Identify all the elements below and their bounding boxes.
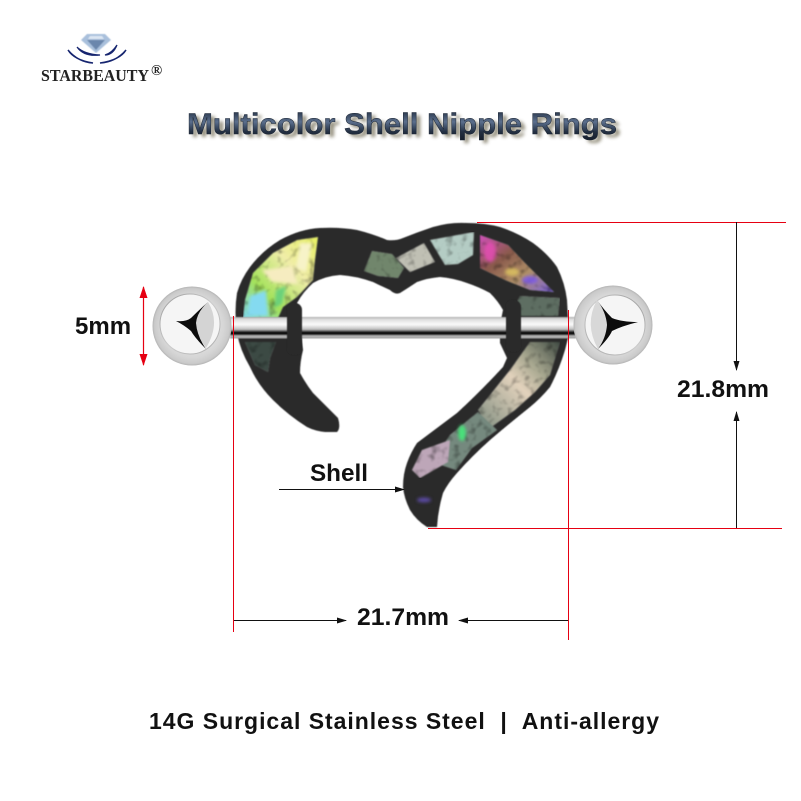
shell highlights [247,242,538,502]
arrows: height [736,222,738,528]
icon: diamond [81,34,111,53]
footer text: 14G Surgical Stainless Steel | Anti-allergy [149,708,659,734]
title: Multicolor Shell Nipple Rings [191,111,621,144]
jewelry: heart nipple ring [152,223,652,527]
arrows: width [234,620,568,622]
label: 21.7mm: 21.7mm [357,604,449,631]
dimension lines: red guides [234,222,786,640]
label: 21.8mm: 21.8mm [677,376,769,403]
right ball [574,286,652,364]
red arrow: ball size [142,287,144,365]
title: Multicolor Shell Nipple Rings [187,108,617,141]
logo: Starbeauty [41,34,162,85]
barbell bar [230,317,576,338]
arrow: shell [279,488,404,490]
label: 5mm: 5mm [75,313,131,340]
left ball [152,286,232,366]
clip loops [287,300,521,355]
registered mark: ® [151,63,162,79]
heart body [236,223,568,527]
label: Shell: Shell [310,460,368,487]
icon: wings [68,45,126,63]
shell: mottled pieces [243,232,560,478]
logo wordmark: STARBEAUTY [41,66,149,85]
